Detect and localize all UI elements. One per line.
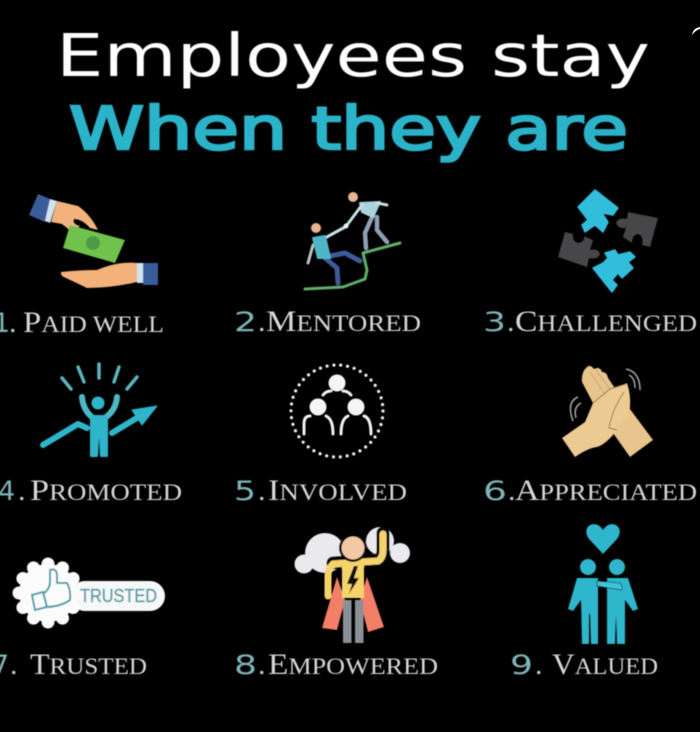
label: 1 paid well: PAID WELL	[23, 306, 164, 339]
label: 7 trusted: .	[10, 648, 18, 681]
panel: empowered	[234, 527, 438, 681]
label: 5 involved: .	[258, 474, 266, 507]
label: 4 promoted: .	[18, 474, 26, 507]
label: 6 appreciated: APPRECIATED	[515, 474, 697, 507]
panel: valued	[510, 524, 658, 681]
title: When they are	[69, 94, 628, 163]
label: 1 paid well: .	[9, 306, 16, 339]
label: 9 valued	[510, 648, 658, 681]
icon: puzzle pieces	[558, 190, 658, 292]
label: 2 mentored: 2	[234, 307, 257, 338]
icon: thumbs-up trusted badge: TRUSTED	[80, 586, 157, 606]
label: 9 valued: .	[535, 648, 542, 681]
label: 8 empowered: 8	[234, 650, 257, 681]
label: 3 challenged: .	[507, 305, 514, 338]
label: 6 appreciated: 6	[483, 476, 507, 507]
title: Employees stay	[56, 21, 650, 90]
panel: challenged	[483, 190, 697, 338]
label: 4 promoted: PROMOTED	[30, 474, 182, 507]
icon: team of three in dotted circle	[291, 365, 383, 457]
icon: cheering figure with rising arrow	[43, 364, 157, 456]
icon: mentor pulling colleague up a step	[305, 192, 400, 289]
icon: hands exchanging money	[29, 194, 158, 288]
label: 5 involved: 5	[234, 476, 256, 507]
label: 3 challenged: 3	[483, 307, 506, 338]
icon: clapping hands	[562, 366, 653, 457]
label: 2 mentored: .	[258, 305, 266, 338]
label: 2 mentored: MENTORED	[266, 305, 421, 338]
panel: paid well	[0, 194, 164, 339]
label: 7 trusted: TRUSTED	[30, 648, 147, 681]
panel: mentored	[234, 192, 421, 338]
label: 8 empowered: .	[258, 648, 266, 681]
label: 6 appreciated: .	[508, 474, 516, 507]
label: 9 valued: VALUED	[552, 648, 658, 681]
panel: promoted	[0, 364, 182, 507]
panel: involved	[234, 365, 407, 507]
icon: two people with heart	[568, 524, 638, 644]
label: 8 empowered: EMPOWERED	[268, 648, 438, 681]
icon: superhero employee with cape and cloud	[294, 527, 410, 643]
panel: trusted	[0, 558, 165, 681]
corner mark	[692, 27, 700, 35]
label: 3 challenged: CHALLENGED	[515, 305, 697, 338]
label: 5 involved: INVOLVED	[268, 474, 407, 507]
panel: appreciated	[483, 366, 697, 507]
title	[56, 21, 650, 163]
icon: thumbs-up trusted badge	[12, 558, 165, 628]
label: 9 valued: 9	[510, 650, 533, 681]
